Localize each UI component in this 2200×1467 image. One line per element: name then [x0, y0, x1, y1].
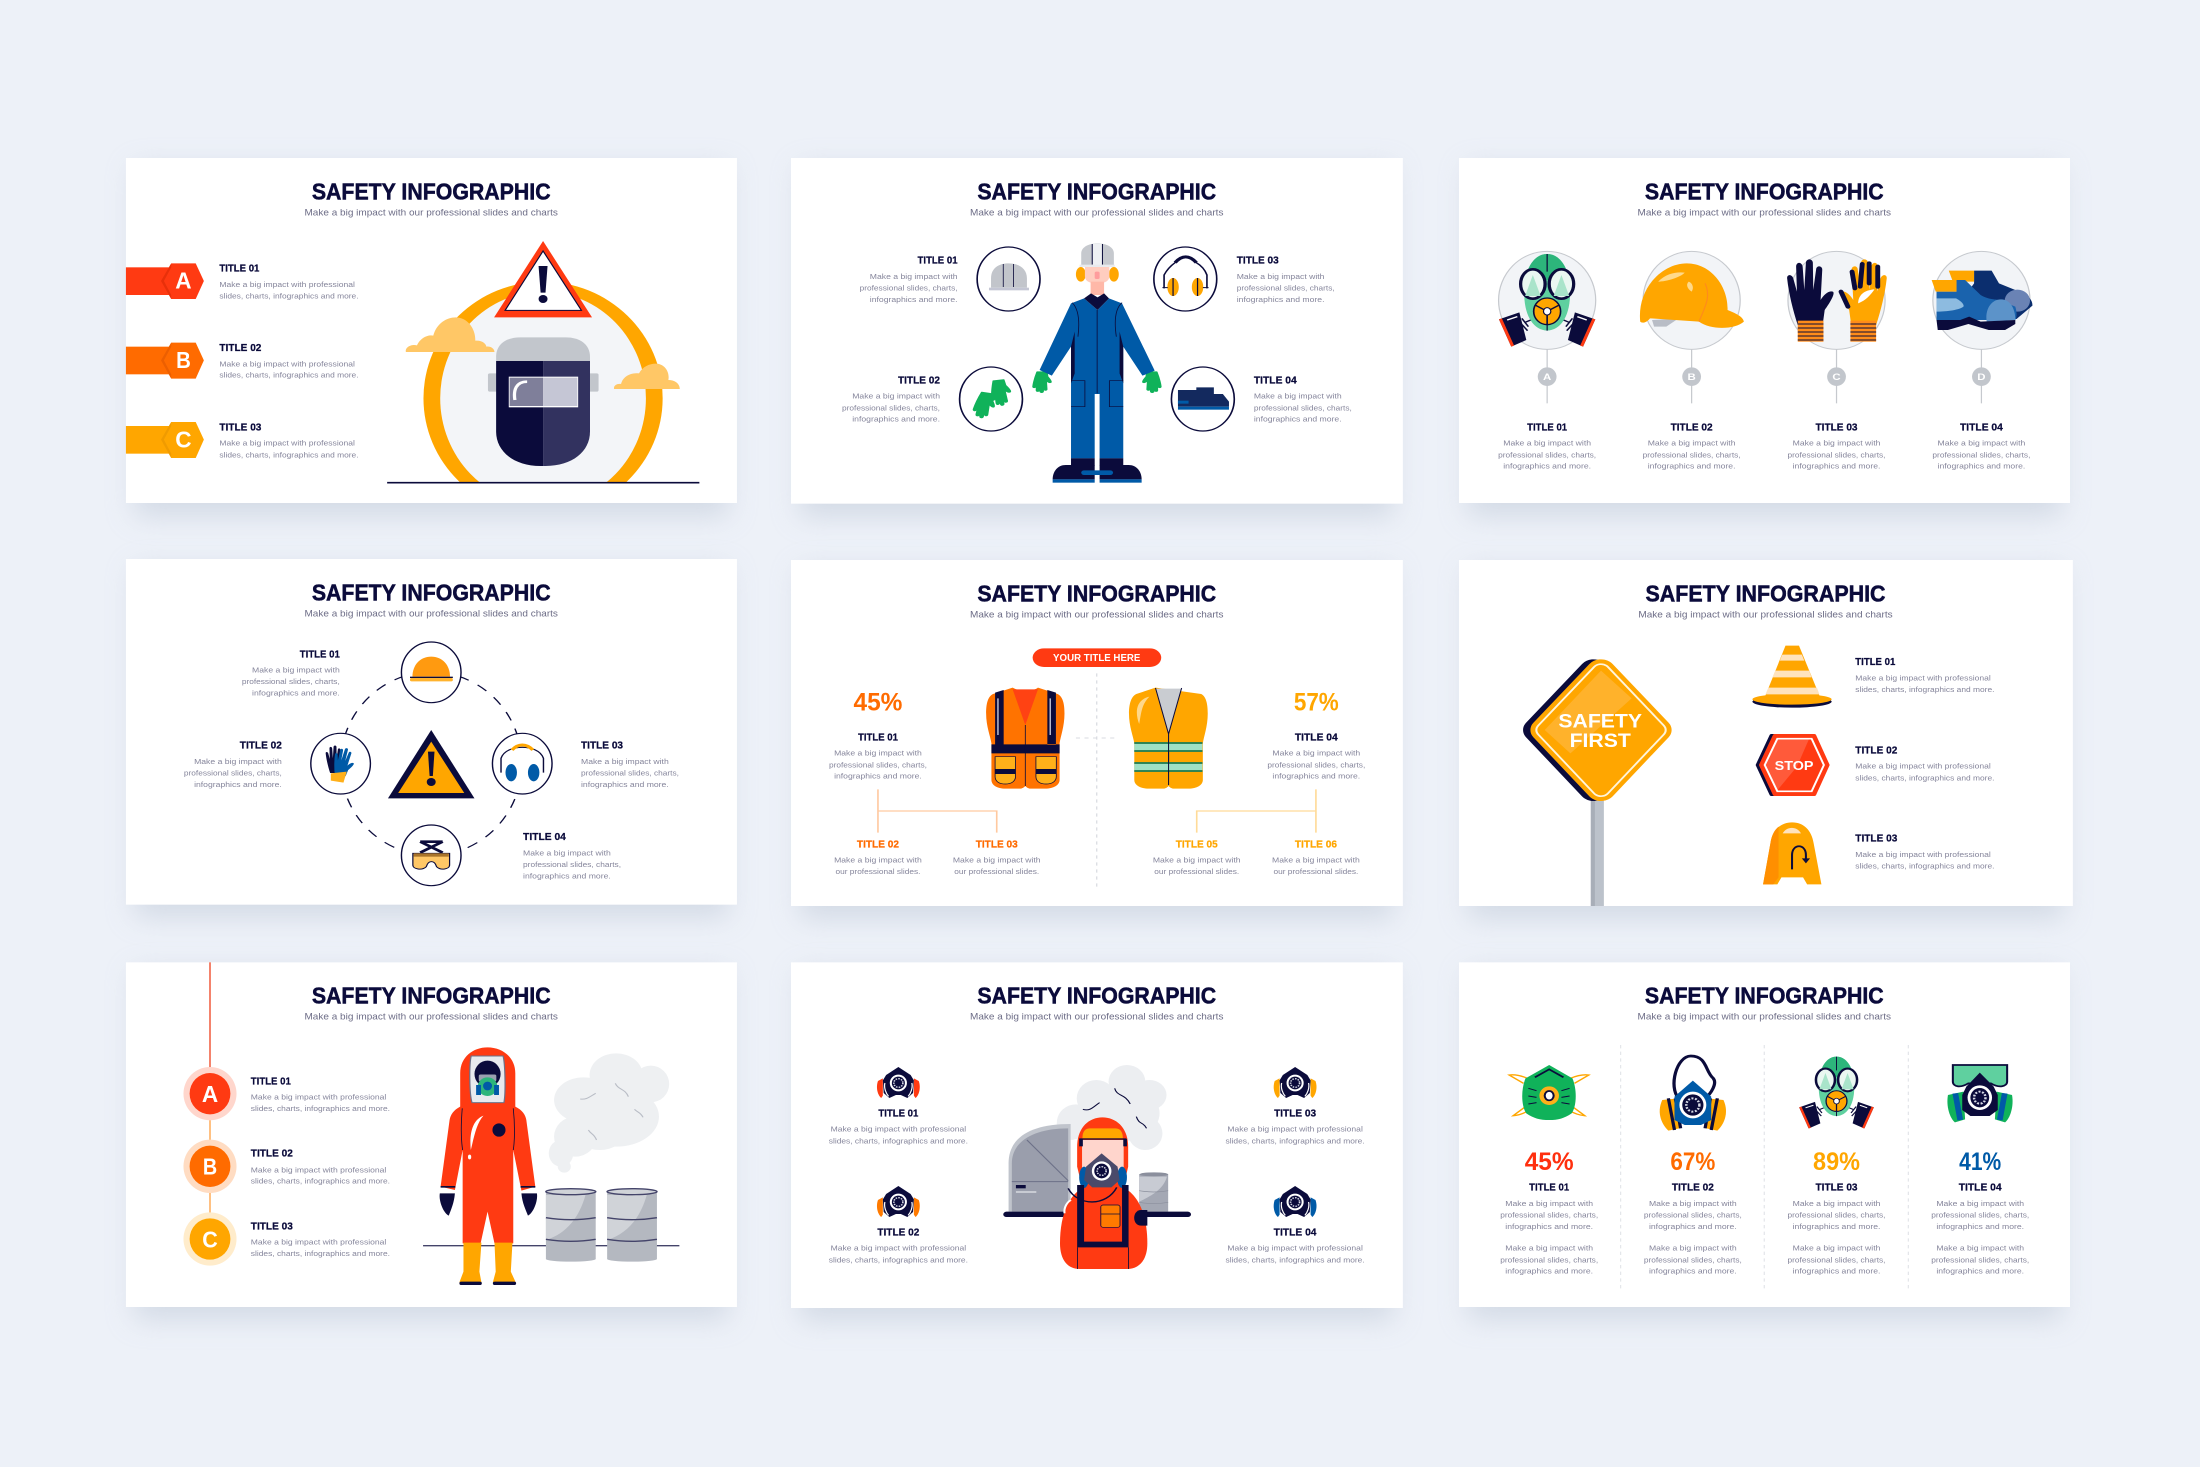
text block: title 02	[184, 741, 282, 789]
barrel	[1139, 1172, 1168, 1212]
text block: title 02	[842, 375, 940, 423]
text block: title 03: Make a big impact with	[1793, 1199, 1881, 1208]
right connector	[1197, 789, 1316, 833]
text block: title 02	[834, 839, 922, 876]
text block: title 04: professional slides, charts,	[1267, 760, 1365, 769]
pill label	[1033, 648, 1161, 667]
text block: title 02: TITLE 02	[240, 741, 282, 751]
icon: goggles in circle	[401, 825, 461, 886]
text block: title 04: infographics and more.	[1936, 1222, 2024, 1231]
text block: title 04: Make a big impact with	[1936, 1244, 2024, 1252]
badge C: C	[202, 1226, 218, 1253]
text block: title 01: TITLE 01	[1855, 657, 1896, 668]
text block: title 02: TITLE 02	[898, 375, 940, 386]
badge A	[183, 1067, 237, 1120]
text block: title 03: infographics and more.	[1793, 1267, 1880, 1275]
panel: four protective items with letter badges	[1459, 158, 2070, 517]
text block: title 04: TITLE 04	[1960, 422, 2003, 433]
icon: hard hat in circle	[401, 642, 461, 703]
text block: title 02: slides, charts, infographics and more.	[251, 1177, 390, 1185]
item A: gas mask	[1499, 251, 1596, 403]
text block: title 01: professional slides, charts,	[242, 677, 340, 686]
text block: title 03: Make a big impact with	[1793, 1244, 1881, 1252]
title: SAFETY INFOGRAPHIC	[312, 982, 551, 1009]
text block: title 01: Make a big impact with	[834, 749, 922, 757]
text block: title 04: Make a big impact with	[1272, 749, 1360, 757]
text block: title 04: Make a big impact with	[1936, 1199, 2024, 1208]
icon: green dust mask	[1509, 1065, 1589, 1120]
text block: title 04: Make a big impact with	[1254, 392, 1342, 400]
title: SAFETY INFOGRAPHIC	[1646, 580, 1886, 607]
illustration: ring with welding mask	[387, 241, 700, 484]
item B: hard hat	[1640, 251, 1744, 403]
icon: ear muffs in circle	[492, 733, 552, 794]
text block: title 01: TITLE 01	[858, 732, 898, 743]
icon: traffic cone	[1752, 646, 1832, 708]
subtitle: Make a big impact with our professional slides and charts	[970, 1012, 1223, 1022]
text block: title 03: TITLE 03	[219, 422, 261, 433]
text block: title 01: Make a big impact with	[252, 665, 340, 674]
text block: title 04: infographics and more.	[1936, 1267, 2024, 1275]
text block: title 03: professional slides, charts,	[1788, 1255, 1886, 1264]
panel: welding mask with list A B C	[126, 158, 737, 517]
text block: title 01	[860, 256, 958, 304]
text block: title 01	[1498, 422, 1596, 470]
text block: title 04: professional slides, charts,	[1254, 403, 1352, 412]
text block: title 03: infographics and more.	[1237, 295, 1324, 304]
ribbon C: C	[175, 428, 192, 453]
smoke wisps	[1083, 1088, 1147, 1128]
item C: work gloves	[1787, 251, 1887, 403]
illustration: safety first road sign	[1538, 671, 1657, 906]
subtitle: Make a big impact with our professional slides and charts	[970, 610, 1223, 620]
text block: title 01: infographics and more.	[870, 295, 958, 304]
text block: title 02: Make a big impact with	[1649, 1244, 1737, 1252]
text block: title 03: our professional slides.	[954, 867, 1039, 876]
title: SAFETY INFOGRAPHIC	[312, 579, 551, 606]
text block: title 02	[219, 343, 359, 379]
text block: title 02: TITLE 02	[251, 1149, 293, 1159]
smoke wisps	[580, 1083, 643, 1140]
stat: 67%: 67%	[1670, 1148, 1715, 1175]
text block: title 05: our professional slides.	[1154, 867, 1239, 876]
text block: title 04	[1932, 422, 2030, 470]
text block: title 02: slides, charts, infographics and more.	[219, 371, 359, 379]
text block: title 01: TITLE 01	[1529, 1183, 1570, 1193]
text block: title 03: slides, charts, infographics and more.	[251, 1249, 390, 1258]
text block: title 02: Make a big impact with	[1648, 439, 1736, 447]
text block: title 03: TITLE 03	[1274, 1108, 1316, 1119]
badge B: B	[203, 1153, 217, 1180]
badge A: A	[202, 1081, 218, 1107]
text block: title 01: infographics and more.	[834, 772, 922, 780]
text block: title 03: TITLE 03	[1816, 422, 1858, 433]
text block: title 04: professional slides, charts,	[523, 860, 621, 869]
stat: 45%: 45%	[1525, 1148, 1574, 1175]
text block: title 04: infographics and more.	[1938, 462, 2025, 470]
text block: title 04	[1931, 1183, 2029, 1275]
illustration: hazmat figure	[440, 1047, 537, 1285]
subtitle: Make a big impact with our professional slides and charts	[970, 208, 1223, 218]
text block: title 06: Make a big impact with	[1272, 856, 1360, 864]
barrel left	[546, 1189, 596, 1262]
smoke cloud	[549, 1053, 669, 1173]
illustration: hazmat worker bust	[1060, 1117, 1147, 1269]
text block: title 03: Make a big impact with	[581, 757, 669, 766]
icon: goggle respirator	[1947, 1065, 2013, 1122]
text block: title 03: professional slides, charts,	[581, 768, 679, 777]
title: SAFETY INFOGRAPHIC	[1645, 178, 1884, 205]
icon: respirator orange	[877, 1186, 920, 1217]
text block: title 03	[1237, 256, 1335, 304]
text block: title 04	[523, 832, 621, 880]
text block: title 01: Make a big impact with	[1505, 1244, 1593, 1252]
text block: title 02: slides, charts, infographics and more.	[1855, 773, 1994, 782]
text block: title 02: infographics and more.	[194, 780, 282, 789]
text block: title 01: TITLE 01	[918, 256, 958, 266]
title: SAFETY INFOGRAPHIC	[977, 580, 1216, 607]
title: SAFETY INFOGRAPHIC	[312, 178, 551, 205]
text block: title 03	[581, 741, 679, 789]
title: SAFETY INFOGRAPHIC	[977, 178, 1216, 205]
text block: title 05: TITLE 05	[1176, 839, 1218, 850]
text block: title 03: slides, charts, infographics and more.	[1855, 862, 1994, 870]
text block: title 02: Make a big impact with professional	[219, 359, 355, 368]
stat: 41%: 41%	[1959, 1148, 2001, 1175]
text block: title 01: Make a big impact with professional	[251, 1093, 386, 1101]
text block: title 02: our professional slides.	[836, 867, 920, 876]
text block: title 02	[829, 1227, 968, 1264]
door	[1009, 1124, 1071, 1212]
text block: title 03: Make a big impact with professional	[251, 1238, 386, 1246]
text block: title 01	[219, 264, 359, 300]
text block: title 03: Make a big impact with	[953, 856, 1041, 864]
ribbon B	[126, 343, 204, 379]
text block: title 02: Make a big impact with	[834, 856, 922, 864]
stat: 89%: 89%	[1813, 1148, 1860, 1175]
smoke cloud	[1057, 1065, 1167, 1150]
text block: title 01: infographics and more.	[1505, 1267, 1593, 1275]
text block: title 03: professional slides, charts,	[1788, 450, 1886, 459]
text block: title 03: infographics and more.	[581, 780, 669, 789]
text block: title 04: infographics and more.	[1272, 772, 1360, 780]
text block: title 04: infographics and more.	[1254, 415, 1342, 423]
text block: title 04: infographics and more.	[523, 871, 611, 880]
text block: title 03	[251, 1221, 390, 1258]
text block: title 01: slides, charts, infographics and more.	[219, 291, 359, 300]
text block: title 03: Make a big impact with professional	[219, 439, 355, 447]
panel: hazmat suit with barrels	[126, 962, 737, 1320]
pill label: YOUR TITLE HERE	[1053, 653, 1140, 664]
text block: title 03: Make a big impact with	[1237, 272, 1325, 281]
text block: title 01	[251, 1076, 390, 1113]
icon: helmet in circle	[977, 247, 1040, 311]
text block: title 04: professional slides, charts,	[1932, 450, 2030, 459]
text block: title 04: Make a big impact with professional	[1227, 1244, 1363, 1252]
text block: title 03: TITLE 03	[251, 1221, 293, 1232]
text block: title 02: TITLE 02	[1855, 745, 1897, 756]
text block: title 02: Make a big impact with	[1649, 1199, 1737, 1208]
text block: title 01: slides, charts, infographics and more.	[1855, 685, 1994, 694]
text block: title 02: professional slides, charts,	[1643, 450, 1741, 459]
ribbon A: A	[175, 269, 192, 294]
text block: title 03: Make a big impact with professional	[1227, 1125, 1363, 1133]
item D: safety boots	[1932, 251, 2032, 403]
panel: worker with protective equipment	[791, 158, 1403, 517]
text block: title 05: Make a big impact with	[1153, 856, 1241, 864]
icon: respirator yellow	[1274, 1067, 1317, 1098]
subtitle: Make a big impact with our professional slides and charts	[1638, 208, 1891, 218]
icon: gas mask	[1799, 1057, 1874, 1128]
item D: safety boots: D	[1977, 373, 1986, 383]
text block: title 01: Make a big impact with	[870, 272, 958, 281]
panel: respirators and hazmat worker	[791, 962, 1403, 1321]
icon: respirator blue	[1274, 1186, 1317, 1217]
text block: title 02: infographics and more.	[1649, 1222, 1737, 1231]
text block: title 01: professional slides, charts,	[1498, 450, 1596, 459]
illustration: worker in blue coverall	[1033, 243, 1161, 483]
text block: title 03	[1788, 422, 1886, 470]
text block: title 04	[1226, 1227, 1365, 1264]
panel: safety first signs	[1459, 560, 2073, 919]
text block: title 03: TITLE 03	[1855, 834, 1897, 844]
text block: title 04: TITLE 04	[523, 832, 566, 843]
illustration: safety first road sign: SAFETY	[1558, 709, 1643, 732]
text block: title 03: TITLE 03	[581, 741, 623, 751]
text block: title 02: professional slides, charts,	[1644, 1211, 1742, 1219]
text block: title 04: Make a big impact with	[1938, 439, 2026, 447]
column dividers	[1621, 1045, 1908, 1288]
text block: title 01: Make a big impact with professional	[831, 1125, 966, 1133]
ribbon B: B	[176, 348, 191, 373]
icon: caution floor stand	[1763, 822, 1821, 884]
title: SAFETY INFOGRAPHIC	[977, 982, 1216, 1009]
text block: title 03: slides, charts, infographics and more.	[219, 450, 359, 459]
text block: title 03	[1855, 834, 1994, 870]
text block: title 01: infographics and more.	[252, 688, 340, 697]
text block: title 04: TITLE 04	[1274, 1227, 1317, 1238]
text block: title 01: infographics and more.	[1505, 1222, 1593, 1231]
text block: title 04	[1267, 732, 1365, 780]
text block: title 01: TITLE 01	[251, 1076, 291, 1087]
text block: title 01: TITLE 01	[219, 264, 260, 274]
title: SAFETY INFOGRAPHIC	[1645, 982, 1884, 1009]
text block: title 01: professional slides, charts,	[1500, 1255, 1598, 1264]
text block: title 02: Make a big impact with	[852, 392, 940, 400]
icon: stop sign: STOP	[1775, 758, 1813, 773]
text block: title 02	[1644, 1183, 1742, 1275]
ground bar	[1007, 1206, 1188, 1222]
icon: stop sign	[1757, 735, 1828, 795]
text block: title 02: professional slides, charts,	[184, 768, 282, 777]
text block: title 03: TITLE 03	[976, 839, 1018, 850]
text block: title 02: professional slides, charts,	[1644, 1255, 1742, 1264]
illustration: orange vest	[986, 688, 1064, 789]
text block: title 03	[1788, 1183, 1886, 1275]
text block: title 04: TITLE 04	[1295, 732, 1338, 743]
text block: title 02: Make a big impact with professional	[831, 1244, 966, 1252]
icon: ear muffs in circle	[1154, 247, 1217, 311]
text block: title 06: TITLE 06	[1295, 839, 1337, 850]
text block: title 03: infographics and more.	[1793, 1222, 1880, 1231]
text block: title 02: infographics and more.	[1648, 462, 1736, 470]
icon: half-face respirator blue	[1660, 1056, 1726, 1131]
text block: title 05	[1153, 839, 1241, 876]
text block: title 03	[1226, 1108, 1365, 1145]
centre divider	[1076, 673, 1119, 887]
text block: title 01: Make a big impact with	[1505, 1199, 1593, 1208]
text block: title 02: Make a big impact with	[194, 757, 282, 766]
text block: title 01: TITLE 01	[878, 1108, 919, 1119]
timeline line	[208, 962, 212, 1073]
ribbon C	[126, 422, 204, 458]
timeline connector lower	[208, 1113, 212, 1220]
left connector	[878, 789, 997, 833]
text block: title 01: TITLE 01	[300, 649, 340, 660]
illustration: yellow vest	[1129, 688, 1208, 789]
text block: title 03	[219, 422, 359, 459]
text block: title 02: infographics and more.	[1649, 1267, 1737, 1275]
item A: gas mask: A	[1543, 373, 1552, 383]
text block: title 01: professional slides, charts,	[860, 284, 958, 292]
text block: title 02: TITLE 02	[1672, 1183, 1714, 1193]
text block: title 01: slides, charts, infographics and more.	[829, 1136, 968, 1145]
right percentage: 57%	[1294, 688, 1339, 716]
text block: title 04: slides, charts, infographics and more.	[1226, 1255, 1365, 1264]
text block: title 04: Make a big impact with	[523, 848, 611, 857]
text block: title 02: slides, charts, infographics and more.	[829, 1255, 968, 1264]
left percentage: 45%	[853, 688, 902, 716]
ribbon A	[126, 263, 204, 299]
text block: title 06: our professional slides.	[1273, 867, 1358, 876]
badge B	[183, 1140, 237, 1193]
text block: title 04: TITLE 04	[1254, 375, 1297, 386]
text block: title 02	[251, 1149, 390, 1185]
text block: title 03	[953, 839, 1041, 876]
icon: gloves in circle	[960, 367, 1022, 431]
text block: title 01	[1500, 1183, 1598, 1275]
icon: respirator red	[877, 1067, 920, 1098]
text block: title 03: TITLE 03	[1237, 256, 1279, 266]
panel: warning cycle	[126, 559, 737, 918]
text block: title 03: TITLE 03	[1816, 1183, 1858, 1193]
text block: title 03: professional slides, charts,	[1788, 1211, 1886, 1219]
icon: boots in circle	[1171, 367, 1234, 431]
panel: respirator statistics	[1459, 962, 2070, 1320]
text block: title 01	[1855, 657, 1994, 694]
text block: title 01	[242, 649, 340, 697]
icon: gloves in circle	[311, 733, 370, 794]
illustration: safety first road sign: FIRST	[1570, 729, 1631, 751]
subtitle: Make a big impact with our professional slides and charts	[304, 609, 558, 619]
badge C	[183, 1212, 237, 1266]
text block: title 02	[1643, 422, 1741, 470]
icon: warning triangle	[388, 730, 474, 798]
text block: title 02: TITLE 02	[877, 1227, 919, 1238]
text block: title 06	[1272, 839, 1360, 876]
text block: title 01	[829, 732, 927, 780]
item C: work gloves: C	[1832, 373, 1841, 383]
subtitle: Make a big impact with our professional slides and charts	[304, 1012, 558, 1022]
text block: title 02: TITLE 02	[857, 839, 899, 850]
text block: title 03: Make a big impact with	[1793, 439, 1881, 447]
text block: title 01: professional slides, charts,	[829, 760, 927, 769]
text block: title 02	[1855, 745, 1994, 782]
text block: title 01: professional slides, charts,	[1500, 1211, 1598, 1219]
text block: title 04: professional slides, charts,	[1931, 1211, 2029, 1219]
subtitle: Make a big impact with our professional slides and charts	[304, 208, 558, 218]
text block: title 01: Make a big impact with	[1503, 439, 1591, 447]
barrel right	[607, 1189, 657, 1262]
item B: hard hat: B	[1688, 373, 1696, 383]
text block: title 01: Make a big impact with professional	[219, 280, 355, 289]
subtitle: Make a big impact with our professional slides and charts	[1638, 610, 1893, 620]
text block: title 03: Make a big impact with professional	[1855, 850, 1991, 859]
text block: title 02: TITLE 02	[219, 343, 261, 354]
text block: title 04: professional slides, charts,	[1931, 1255, 2029, 1264]
text block: title 02: Make a big impact with professional	[251, 1165, 386, 1174]
text block: title 03: slides, charts, infographics and more.	[1226, 1136, 1365, 1145]
subtitle: Make a big impact with our professional slides and charts	[1638, 1012, 1891, 1022]
text block: title 03: infographics and more.	[1793, 462, 1880, 470]
text block: title 01: Make a big impact with professional	[1855, 673, 1991, 682]
text block: title 01: TITLE 01	[1527, 422, 1568, 433]
text block: title 01: slides, charts, infographics and more.	[251, 1104, 390, 1113]
text block: title 02: TITLE 02	[1671, 422, 1713, 433]
text block: title 02: infographics and more.	[852, 415, 940, 423]
dashed cycle ring	[341, 672, 522, 855]
text block: title 01	[829, 1108, 968, 1145]
text block: title 02: Make a big impact with professional	[1855, 762, 1991, 770]
panel: high visibility vests	[791, 560, 1403, 919]
text block: title 04: TITLE 04	[1959, 1183, 2002, 1193]
text block: title 04	[1254, 375, 1352, 423]
text block: title 02: professional slides, charts,	[842, 403, 940, 412]
text block: title 03: professional slides, charts,	[1237, 284, 1335, 292]
ground line	[423, 1244, 679, 1248]
text block: title 01: infographics and more.	[1503, 462, 1591, 470]
